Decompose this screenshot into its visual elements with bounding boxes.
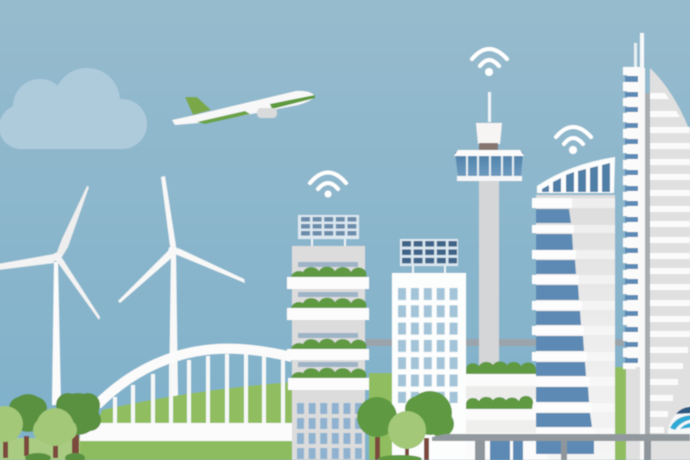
wifi icon: green tower: [310, 172, 346, 198]
ribbed strip with blue slots: [623, 67, 640, 369]
sail stripes: [650, 93, 690, 433]
terrace at tower base: [466, 361, 536, 435]
observation tower: [454, 92, 524, 366]
sail shape: [650, 68, 690, 460]
curved roof: [537, 157, 615, 193]
trees left: [0, 393, 101, 460]
roof glazing: [542, 163, 610, 192]
wifi icon: control tower: [472, 49, 507, 76]
sail tower: [623, 33, 690, 460]
bridge: [80, 349, 292, 441]
wifi icon: curved tower: [556, 127, 591, 154]
hedges: [291, 267, 367, 378]
green hill behind the bridge: [97, 382, 292, 425]
lawn: [78, 441, 292, 460]
airplane: [172, 91, 315, 125]
wind turbine left: [0, 186, 100, 405]
lawn strip by sail tower: [615, 367, 626, 460]
office block: [392, 239, 466, 460]
balcony slabs: [287, 277, 369, 390]
elevated rail line: [432, 434, 690, 460]
cloud: [0, 68, 147, 149]
curved tower: [532, 157, 615, 460]
trees right: [357, 391, 454, 460]
green terrace tower: [287, 215, 369, 460]
monorail train: [668, 405, 690, 436]
glass blue floors: [536, 209, 594, 453]
solar panel: [298, 215, 359, 247]
connecting pipe: [366, 339, 624, 346]
floor slabs: [532, 198, 594, 436]
wind turbine right: [118, 176, 245, 398]
lower windows: [297, 403, 362, 460]
lawn behind towers: [369, 373, 393, 460]
solar panel: [400, 239, 458, 274]
faint slab bands on the shaded side: [572, 198, 615, 436]
